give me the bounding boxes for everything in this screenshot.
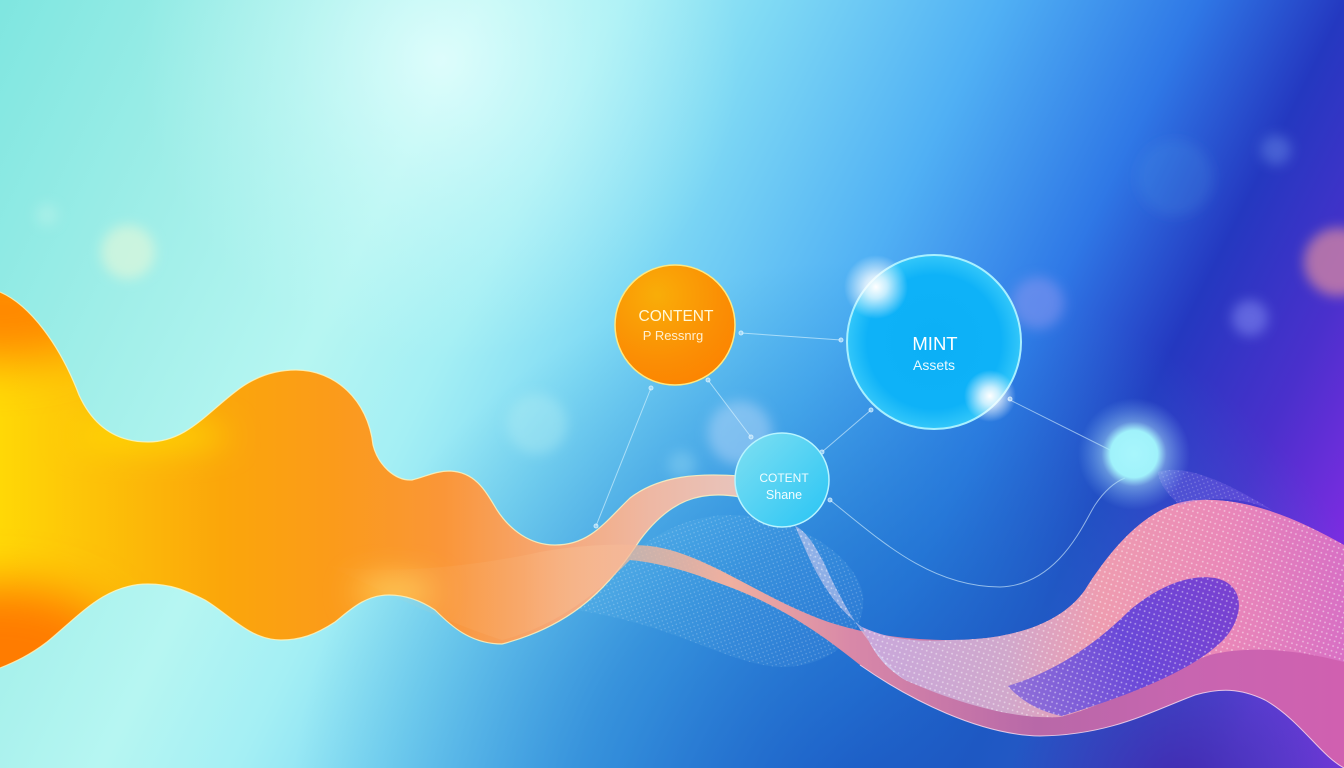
glowing endpoint node	[1078, 398, 1190, 510]
light funnel mesh	[795, 526, 905, 680]
bokeh lights	[36, 135, 1344, 479]
upper right mesh strand	[1158, 470, 1275, 512]
node: mint assets: Assets	[913, 357, 955, 373]
node: mint assets	[844, 255, 1021, 429]
connector lines	[594, 331, 1125, 587]
node: mint assets: MINT	[912, 333, 958, 354]
orange flowing wave	[0, 292, 738, 668]
node: content processing: P Ressnrg	[643, 328, 703, 343]
pink ribbon wave	[320, 470, 1344, 768]
blue dotted mesh wave	[575, 515, 863, 667]
node: content processing	[615, 265, 735, 385]
pink mesh overlay	[862, 500, 1344, 717]
node: content share	[735, 433, 829, 527]
node: content processing: CONTENT	[639, 308, 714, 325]
node: content share: COTENT	[759, 471, 809, 485]
purple inner blob	[1008, 577, 1239, 716]
node: content share: Shane	[766, 488, 802, 502]
